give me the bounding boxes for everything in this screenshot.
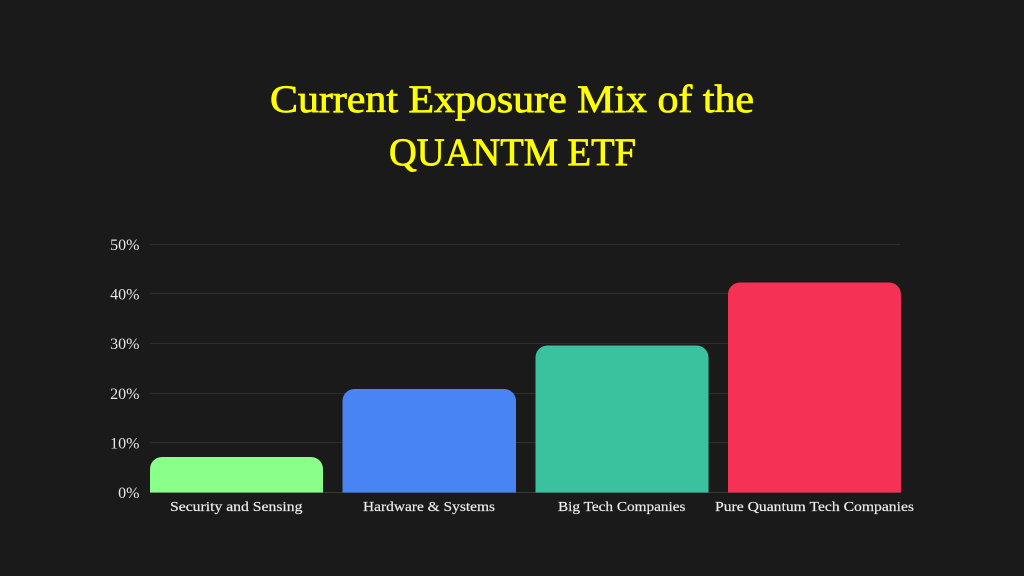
bar: Big Tech Companies bbox=[536, 346, 708, 492]
title: Current Exposure Mix of the bbox=[270, 78, 754, 121]
y axis labels: 50% bbox=[110, 237, 140, 254]
y axis labels: 20% bbox=[110, 386, 140, 403]
bar: Security and Sensing bbox=[150, 457, 323, 492]
y axis labels: 40% bbox=[110, 286, 140, 304]
x axis labels: Hardware & Systems bbox=[363, 500, 495, 515]
title bbox=[270, 78, 754, 174]
x axis labels: Pure Quantum Tech Companies bbox=[715, 500, 914, 515]
y axis labels: 0% bbox=[118, 485, 140, 502]
x axis labels: Security and Sensing bbox=[170, 500, 302, 515]
y axis labels: 30% bbox=[110, 336, 140, 353]
title: QUANTM ETF bbox=[389, 131, 636, 174]
x axis labels bbox=[170, 500, 914, 515]
y axis labels bbox=[110, 237, 140, 502]
bar chart bbox=[150, 282, 901, 492]
x axis labels: Big Tech Companies bbox=[558, 500, 686, 515]
bar: Hardware & Systems bbox=[342, 389, 516, 492]
bar: Pure Quantum Tech Companies bbox=[728, 282, 901, 492]
y axis labels: 10% bbox=[110, 436, 140, 452]
